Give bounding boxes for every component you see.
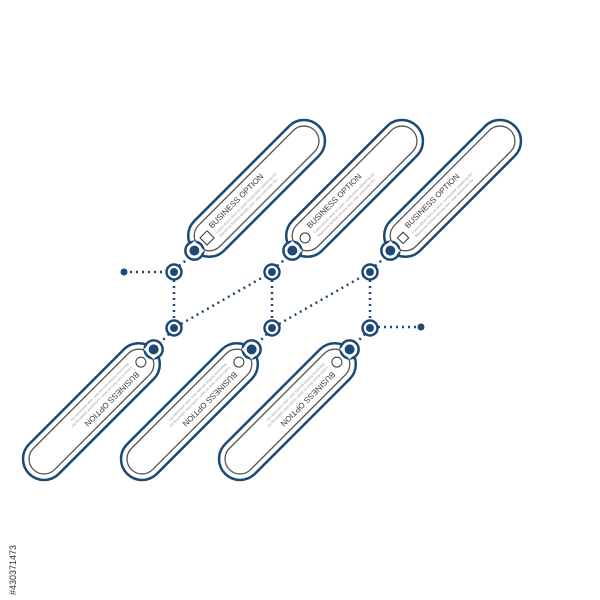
pill 3 — [369, 111, 530, 272]
pill 6: BUSINESS OPTION — [279, 370, 337, 428]
pill 2: BUSINESS OPTION — [305, 172, 363, 230]
connector lines — [124, 256, 421, 345]
pill 5: Lorem ipsum dolor sit amet, consectetur adipiscing elit — [169, 366, 231, 428]
pill 5: Maecenas facilisis gravida sem, vitae sollicitudin dui — [168, 362, 228, 422]
pill 2 — [271, 111, 432, 272]
pill 6: Maecenas facilisis gravida sem, vitae sollicitudin dui — [266, 362, 326, 422]
pill 2: Lorem ipsum dolor sit amet, consectetur adipiscing elit — [313, 172, 375, 234]
end dots — [120, 268, 424, 330]
pill 4: BUSINESS OPTION — [83, 370, 141, 428]
pill 3: BUSINESS OPTION — [403, 172, 461, 230]
pill 3: Lorem ipsum dolor sit amet, consectetur adipiscing elit — [411, 172, 473, 234]
pill 1: BUSINESS OPTION — [207, 172, 265, 230]
pill 1: Maecenas facilisis gravida sem, vitae sollicitudin dui — [218, 178, 278, 238]
pill 1 — [173, 111, 334, 272]
pill 1: Lorem ipsum dolor sit amet, consectetur adipiscing elit — [215, 172, 277, 234]
pill 5: BUSINESS OPTION — [181, 370, 239, 428]
node circles — [166, 264, 378, 336]
side id text: #430371473 — [8, 545, 18, 595]
pill 6: Lorem ipsum dolor sit amet, consectetur adipiscing elit — [267, 366, 329, 428]
pill 2: Maecenas facilisis gravida sem, vitae sollicitudin dui — [316, 178, 376, 238]
pill 4: Maecenas facilisis gravida sem, vitae sollicitudin dui — [70, 362, 130, 422]
pill 6 — [210, 328, 371, 489]
pill 3: Maecenas facilisis gravida sem, vitae sollicitudin dui — [414, 178, 474, 238]
pill 4 — [14, 328, 175, 489]
pill 4: Lorem ipsum dolor sit amet, consectetur adipiscing elit — [71, 366, 133, 428]
pill 5 — [112, 328, 273, 489]
